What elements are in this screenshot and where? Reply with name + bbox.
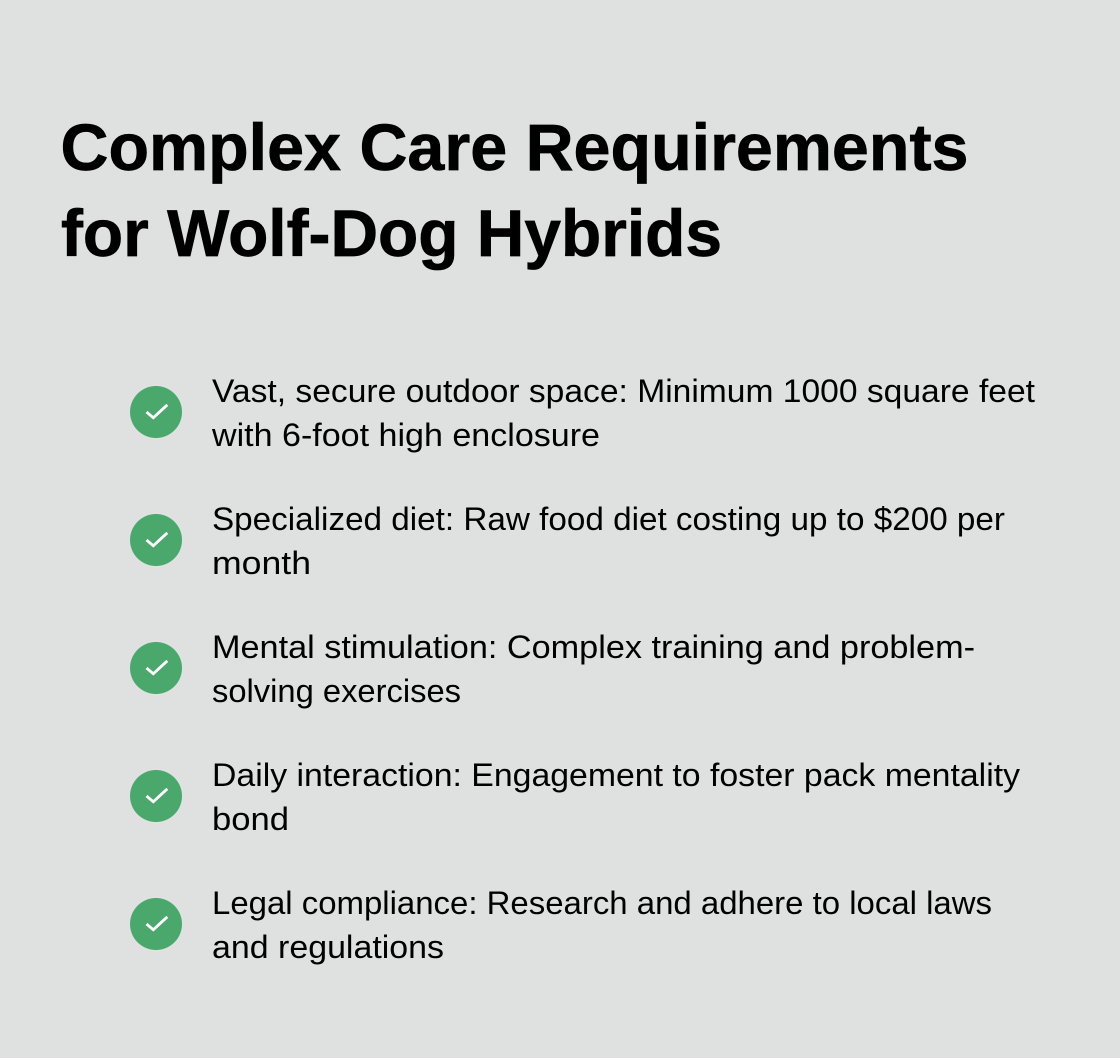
item: legal compliance — [130, 885, 992, 965]
item: daily interaction: Daily interaction: Engagement to foster pack mentality — [212, 757, 1021, 793]
item: outdoor space: with 6-foot high enclosure — [211, 417, 600, 453]
item: specialized diet: Specialized diet: Raw food diet costing up to $200 per — [212, 501, 1005, 537]
item: mental stimulation — [130, 629, 975, 709]
item: specialized diet — [130, 501, 1005, 581]
item: daily interaction — [130, 757, 1021, 837]
item: legal compliance: Legal compliance: Research and adhere to local laws — [212, 885, 992, 921]
item: outdoor space — [130, 373, 1035, 453]
title: for Wolf-Dog Hybrids — [61, 196, 722, 270]
item: mental stimulation: Mental stimulation: Complex training and problem- — [212, 629, 975, 665]
title: Complex Care Requirements — [60, 110, 968, 184]
item: mental stimulation: solving exercises — [212, 673, 461, 709]
item: legal compliance: and regulations — [212, 929, 444, 965]
item: outdoor space: Vast, secure outdoor space: Minimum 1000 square feet — [212, 373, 1035, 409]
item: daily interaction: bond — [212, 801, 289, 837]
item: specialized diet: month — [212, 545, 311, 581]
checklist — [130, 373, 1035, 965]
title — [60, 110, 968, 270]
